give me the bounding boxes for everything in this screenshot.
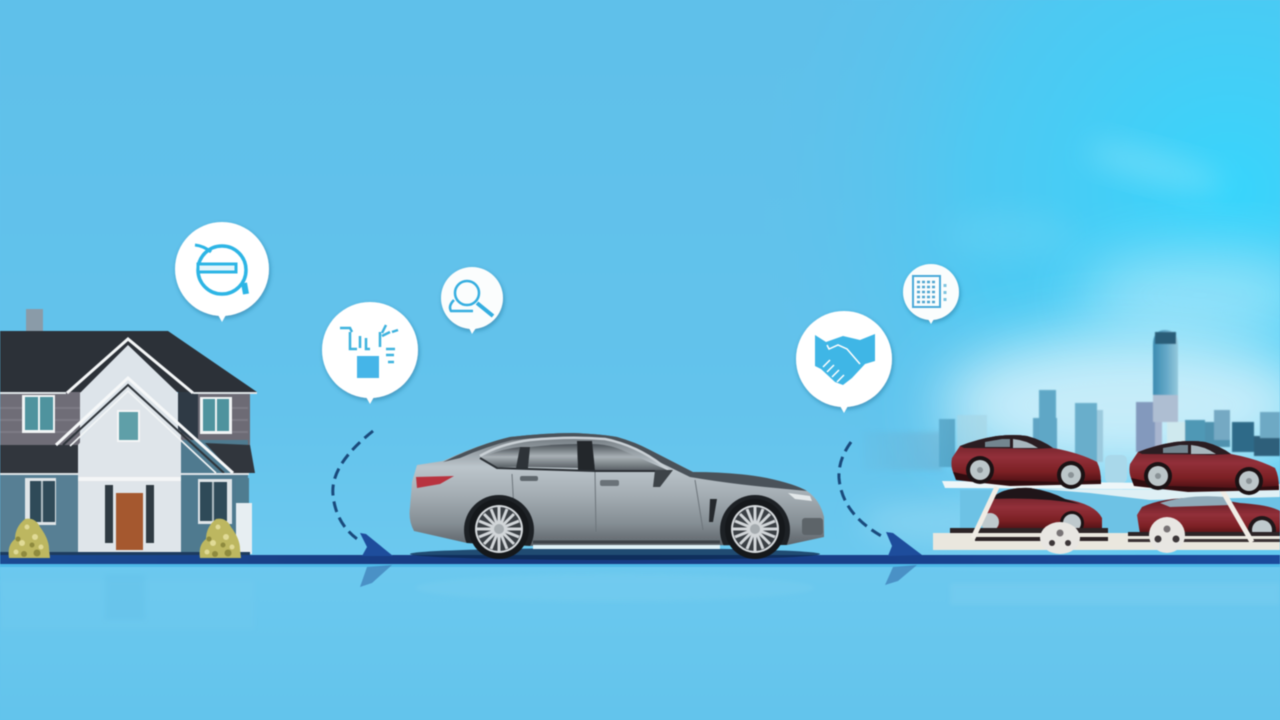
- door sidelights: [105, 485, 113, 543]
- upper platform: [942, 481, 1280, 490]
- calendar grid icon: [913, 276, 945, 307]
- body: [410, 433, 824, 546]
- lower left red car: [981, 488, 1102, 535]
- upper left red car: [951, 435, 1101, 489]
- road reflection: [0, 564, 1280, 630]
- front vent: [709, 499, 717, 522]
- bubble: inspection ring icon: [175, 222, 269, 322]
- flowchart icon: [340, 325, 398, 378]
- window: center: [117, 410, 140, 442]
- handshake icon: [815, 334, 875, 385]
- bush right: [200, 519, 241, 558]
- road line: [0, 555, 1280, 564]
- bubble: handshake icon: [796, 311, 892, 413]
- platform support hump: [1040, 489, 1280, 500]
- roof rail: [480, 438, 668, 470]
- dashed arrow 1: [333, 431, 393, 556]
- upper right red car: [1129, 441, 1279, 495]
- platform rails: [950, 528, 1108, 533]
- bubble: calendar grid icon: [903, 264, 959, 324]
- rear pillar: [516, 447, 530, 468]
- upper walls: [0, 392, 82, 446]
- lower side walls: [0, 474, 82, 554]
- dashed arrow 2: [839, 442, 922, 556]
- water tower: [1105, 455, 1127, 483]
- arrow 2 reflection: [885, 565, 917, 585]
- window: lower right: [198, 479, 232, 524]
- support struts: [973, 487, 1252, 542]
- upper gable trim: [67, 339, 193, 393]
- door lines and handles: [512, 472, 703, 532]
- window: lower left: [25, 478, 56, 525]
- base line: [0, 552, 250, 555]
- roof dark line: [443, 433, 807, 491]
- grey car: [410, 433, 824, 565]
- door: [116, 493, 143, 550]
- mirror: [653, 470, 673, 487]
- wheel arches: [464, 494, 790, 546]
- car carrier: [933, 435, 1280, 554]
- main roof: [0, 331, 257, 392]
- porch band: [78, 477, 181, 481]
- carrier backdrop: [960, 490, 1280, 534]
- lower platform: [933, 533, 1280, 550]
- front grille: [802, 518, 823, 535]
- lower right red car: [1137, 496, 1280, 544]
- bubble: magnifier icon: [441, 267, 503, 334]
- ring icon: [195, 245, 246, 294]
- window base line: [480, 458, 668, 471]
- b pillar: [577, 441, 595, 470]
- lower gable wall: [78, 383, 181, 554]
- window: rear quarter: [480, 447, 520, 467]
- window: upper right: [200, 397, 232, 434]
- house: [0, 309, 257, 558]
- chimney: [26, 309, 43, 332]
- window: rear door: [528, 444, 578, 468]
- wheel: rear: [469, 499, 529, 559]
- tail light: [416, 476, 454, 488]
- side roofs: [0, 445, 78, 473]
- lower gable trim: [56, 378, 233, 473]
- magnifier icon: [450, 281, 493, 316]
- window: front door: [592, 444, 667, 470]
- spare wheel left: [1040, 522, 1080, 554]
- spare wheel right: [1149, 517, 1185, 553]
- sill: [533, 545, 720, 549]
- arrow 1 reflection: [360, 565, 392, 587]
- headlight: [788, 493, 812, 501]
- upper gable wall: [80, 345, 178, 460]
- bubble: flowchart icon: [322, 302, 418, 404]
- window: upper left: [22, 395, 55, 433]
- side post: [236, 503, 252, 554]
- city skyline: [862, 330, 1280, 470]
- bush left: [9, 519, 50, 558]
- roof shadow under gable: [178, 392, 198, 445]
- ground shadow: [410, 548, 820, 560]
- wheel: front: [725, 499, 785, 559]
